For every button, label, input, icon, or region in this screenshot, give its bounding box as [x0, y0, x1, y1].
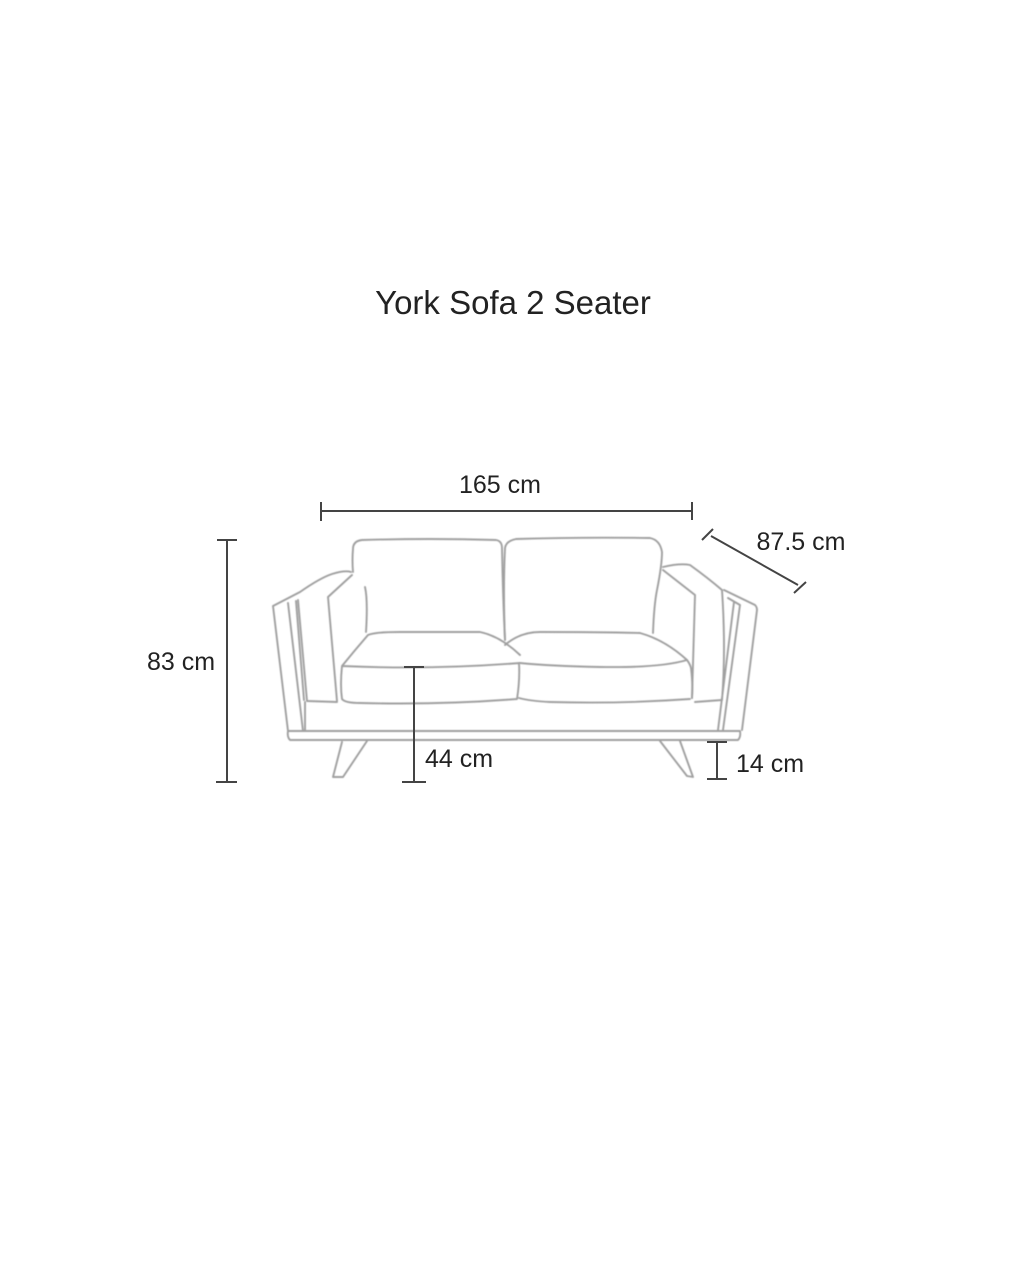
right leg: [660, 741, 693, 777]
dimension: seat height 44 cm: 44 cm: [425, 745, 493, 773]
dimension: seat height 44 cm: [402, 667, 493, 782]
left leg: [333, 741, 367, 777]
back cushion right: [504, 538, 662, 640]
title: York Sofa 2 Seater: [375, 284, 651, 321]
base rail: [288, 702, 740, 740]
dimension: leg height 14 cm: [707, 742, 804, 779]
dimension: leg height 14 cm: 14 cm: [736, 750, 804, 778]
seat cushion right: [505, 632, 692, 703]
seat cushion left: [341, 632, 520, 704]
dimension: width 165 cm: 165 cm: [459, 471, 541, 499]
dimension: width 165 cm: [321, 471, 692, 521]
dimension: depth 87.5 cm: [702, 528, 845, 593]
dimension: height 83 cm: [147, 540, 237, 782]
back cushion left: [352, 539, 505, 640]
sofa line drawing: [273, 538, 757, 777]
left arm: [273, 571, 352, 731]
dimension: height 83 cm: 83 cm: [147, 648, 215, 676]
right arm: [663, 564, 757, 730]
dimension: depth 87.5 cm: 87.5 cm: [757, 528, 845, 556]
